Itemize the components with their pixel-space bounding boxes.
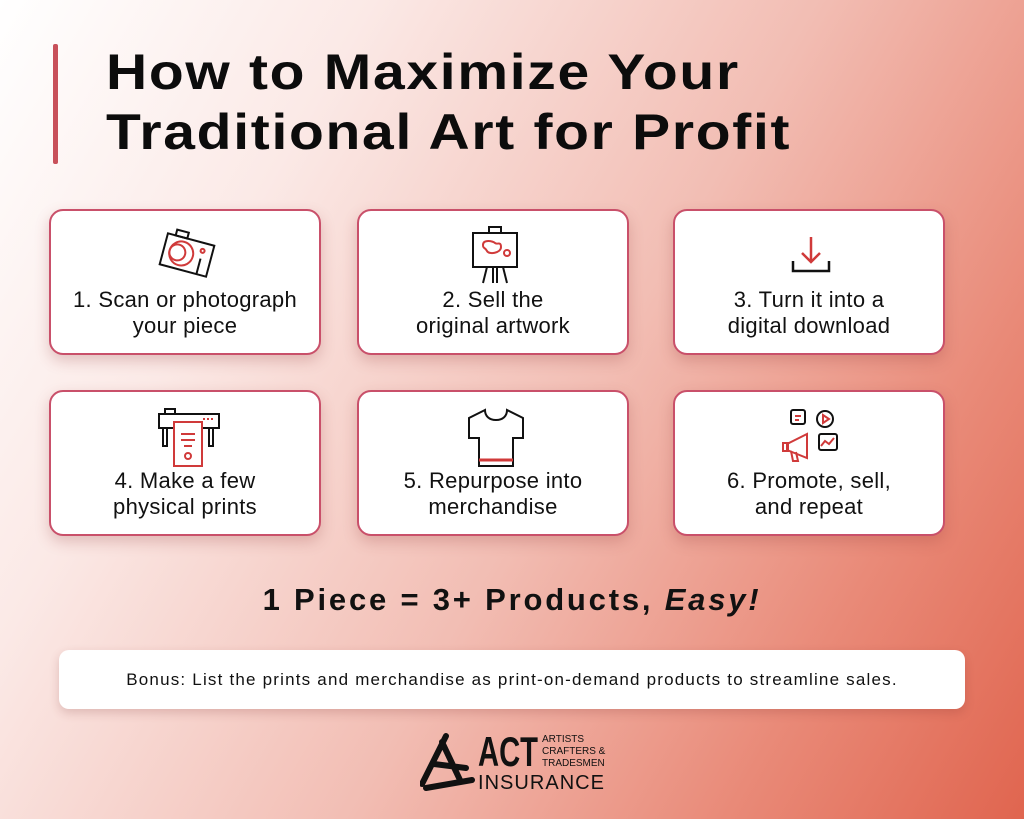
icon: easel [472,226,518,284]
title: How to Maximize Your [106,44,740,100]
tagline: 1 Piece = 3+ Products, Easy! [263,582,761,617]
bonus callout: Bonus: List the prints and merchandise as print-on-demand products to streamline sales. [126,670,898,689]
label [416,287,570,338]
label: digital download [728,313,890,338]
label: merchandise [428,494,558,519]
card 6: promote [673,390,945,536]
card 5: merchandise [357,390,629,536]
logo: ACT Insurance: ACT [478,728,538,775]
label: 6. Promote, sell, [727,468,891,493]
icon: printer [158,408,220,467]
logo: ACT Insurance: CRAFTERS & [542,746,606,757]
label [404,468,582,519]
label: your piece [133,313,237,338]
label: original artwork [416,313,570,338]
card 2: sell original [357,209,629,355]
icon: t-shirt [468,408,524,467]
label: 5. Repurpose into [404,468,582,493]
logo: ACT Insurance: INSURANCE [478,772,604,794]
label [728,287,890,338]
title accent bar [53,44,58,164]
label: 4. Make a few [115,468,255,493]
logo: ACT Insurance: TRADESMEN [542,758,605,769]
title: Traditional Art for Profit [106,104,791,160]
logo: ACT Insurance [420,728,606,794]
label [113,468,257,519]
card 1: scan or photograph [49,209,321,355]
label: 3. Turn it into a [734,287,884,312]
label: physical prints [113,494,257,519]
label: and repeat [755,494,863,519]
title [106,44,791,160]
card 3: digital download [673,209,945,355]
logo: ACT Insurance: ARTISTS [542,734,584,745]
label: 1. Scan or photograph [73,287,297,312]
icon: camera [158,228,216,278]
bonus callout [59,650,965,709]
card 4: physical prints [49,390,321,536]
icon: download [792,237,830,272]
label [727,468,891,519]
icon: megaphone and media [782,409,838,462]
label: 2. Sell the [442,287,544,312]
label [73,287,297,338]
